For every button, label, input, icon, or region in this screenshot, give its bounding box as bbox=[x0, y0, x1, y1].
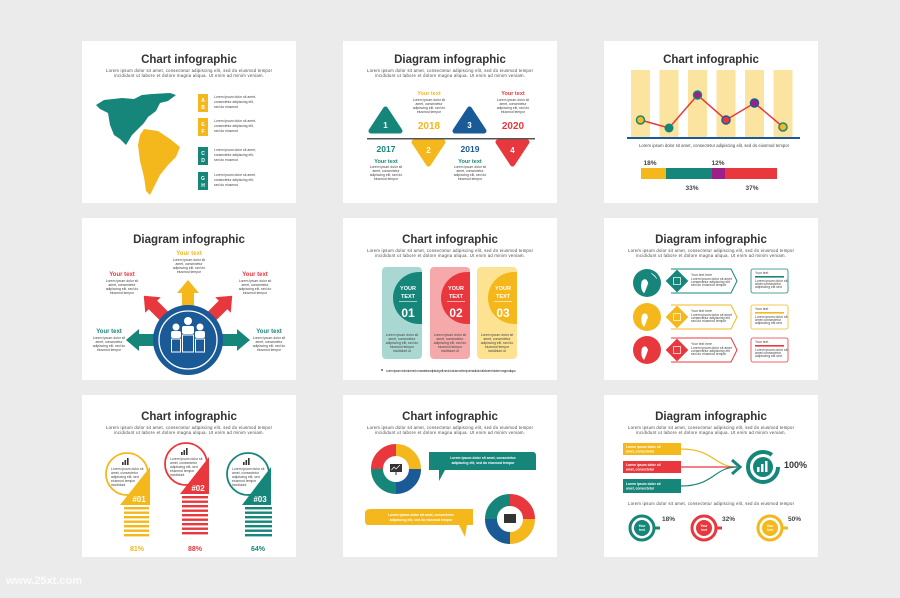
arrows bbox=[126, 280, 250, 351]
title: Diagram infographic bbox=[655, 411, 768, 423]
card 03: eiusmod tempor bbox=[485, 345, 510, 349]
text: right: amet, consectetur bbox=[256, 340, 283, 344]
bulb 01: amet, consectetur bbox=[111, 471, 139, 475]
percent circle 32 bbox=[692, 516, 735, 540]
text: upper left: adipiscing elit, sed do bbox=[106, 287, 138, 291]
step 2: 2018 bbox=[418, 121, 441, 132]
bulb 01: Lorem ipsum dolor sit bbox=[111, 467, 143, 471]
row 1 teal: Lorem ipsum dolor sit bbox=[755, 279, 787, 283]
slide: arrows diagram bbox=[82, 218, 296, 380]
subtitle text bbox=[628, 248, 795, 258]
bulb 02: #02 bbox=[191, 484, 205, 493]
bulb 02: incididunt bbox=[170, 473, 184, 477]
row 1 teal: consectetur adipiscing elit bbox=[691, 280, 730, 284]
subtitle text: incididunt ut labore et dolore magna aliqua. Ut enim ad minim veniam. bbox=[375, 430, 525, 435]
slide: line chart bbox=[604, 41, 818, 203]
card 02: amet, consectetur bbox=[437, 337, 464, 341]
line chart bbox=[636, 91, 787, 132]
callout teal: adipiscing elit, sed do eiusmod tempor bbox=[452, 461, 515, 465]
row 3 red: Your text bbox=[755, 340, 768, 344]
step 4: amet, consectetur bbox=[500, 102, 527, 106]
bulb 01: eiusmod tempor bbox=[111, 479, 136, 483]
row 1 teal: sed do eiusmod tempor bbox=[691, 283, 727, 287]
row 2 yellow: Lorem ipsum dolor sit bbox=[755, 315, 787, 319]
row 2 yellow: sed do eiusmod tempor bbox=[691, 319, 727, 323]
text: left: Your text bbox=[96, 329, 122, 335]
card 02: eiusmod tempor bbox=[438, 345, 463, 349]
callout yellow bbox=[365, 509, 473, 537]
input boxes: amet, consectetur bbox=[626, 450, 655, 454]
legend list: Lorem ipsum dolor sit amet, bbox=[214, 173, 256, 177]
legend list: G bbox=[201, 176, 205, 182]
title: Chart infographic bbox=[402, 411, 499, 423]
subtitle text: Lorem ipsum dolor sit amet, consectetur adipiscing elit, sed do eiusmod tempor bbox=[367, 248, 534, 253]
legend list: H bbox=[201, 183, 205, 189]
text: top: Your text bbox=[176, 251, 202, 257]
text: upper left: eiusmod tempor bbox=[110, 291, 135, 295]
percent circle 50 bbox=[758, 516, 801, 540]
step 1: Lorem ipsum dolor sit bbox=[370, 165, 402, 169]
legend list: Lorem ipsum dolor sit amet, bbox=[214, 95, 256, 99]
percent circle 32: text bbox=[701, 528, 708, 532]
row 3 red: amet consectetur bbox=[755, 351, 782, 355]
text: right: Your text bbox=[256, 329, 282, 335]
bulb 01: adipiscing elit, sed bbox=[111, 475, 139, 479]
card 02: adipiscing elit, sed do bbox=[434, 341, 466, 345]
card 01: adipiscing elit, sed do bbox=[386, 341, 418, 345]
card 01: 01 bbox=[401, 306, 415, 320]
step 2: eiusmod tempor bbox=[417, 110, 442, 114]
step 4: 4 bbox=[510, 146, 515, 155]
text: upper left: amet, consectetur bbox=[109, 283, 136, 287]
stacked bar bbox=[641, 160, 777, 192]
card 03: amet, consectetur bbox=[484, 337, 511, 341]
card 02: incididunt ut bbox=[441, 349, 459, 353]
stacked bar: 18% bbox=[643, 160, 657, 167]
subtitle text: Lorem ipsum dolor sit amet, consectetur adipiscing elit, sed do eiusmod tempor bbox=[367, 68, 534, 73]
card 03: 03 bbox=[496, 306, 510, 320]
bulb 03: adipiscing elit, sed bbox=[232, 475, 260, 479]
donut 2 bbox=[491, 500, 529, 538]
caption: Lorem ipsum dolor sit amet, consectetur adipiscing elit, sed do eiusmod tempor bbox=[639, 143, 790, 148]
subtitle text: Lorem ipsum dolor sit amet, consectetur adipiscing elit, sed do eiusmod tempor bbox=[628, 248, 795, 253]
card 01 bbox=[382, 267, 422, 359]
stacked bar: 33% bbox=[685, 185, 699, 192]
bulb 03: eiusmod tempor bbox=[232, 479, 257, 483]
text: left: adipiscing elit, sed do bbox=[93, 344, 125, 348]
title: Chart infographic bbox=[663, 54, 760, 66]
row 2 yellow: Lorem ipsum dolor sit amet bbox=[691, 313, 732, 317]
card 02: TEXT bbox=[449, 294, 464, 300]
row 2 yellow: Your text bbox=[755, 307, 768, 311]
legend list: sed do eiusmod bbox=[214, 129, 238, 133]
input boxes: amet, consectetur bbox=[626, 486, 655, 490]
legend list: Lorem ipsum dolor sit amet, bbox=[214, 148, 256, 152]
card 01: YOUR bbox=[400, 286, 416, 292]
subtitle text bbox=[628, 425, 795, 435]
step 1 bbox=[370, 109, 402, 181]
row 1 teal bbox=[633, 269, 788, 297]
percent circle 18: 18% bbox=[662, 516, 675, 523]
card 03: Lorem ipsum dolor sit bbox=[481, 333, 513, 337]
central circle with people bbox=[153, 305, 223, 375]
text: upper right: Lorem ipsum dolor sit bbox=[239, 279, 271, 283]
watermark: www.25xt.com bbox=[5, 575, 82, 587]
step 3: Your text bbox=[458, 159, 482, 165]
legend list: F bbox=[201, 129, 205, 135]
text: top bbox=[173, 251, 205, 274]
bulb 01: 81% bbox=[130, 546, 145, 553]
bulb 03 bbox=[227, 453, 272, 553]
bulb 01: #01 bbox=[132, 495, 146, 504]
text: top: amet, consectetur bbox=[176, 262, 203, 266]
input boxes: Lorem ipsum dolor sit bbox=[626, 482, 662, 486]
row 1 teal: Your text bbox=[755, 271, 768, 275]
legend list: Lorem ipsum dolor sit amet, bbox=[214, 119, 256, 123]
callout teal bbox=[429, 452, 536, 481]
row 1 teal: Lorem ipsum dolor sit amet bbox=[691, 277, 732, 281]
text: upper right: Your text bbox=[242, 272, 268, 278]
step 2: Your text bbox=[417, 91, 441, 97]
step 1: amet, consectetur bbox=[373, 169, 400, 173]
card 01: eiusmod tempor bbox=[390, 345, 415, 349]
percent circle 18: text bbox=[639, 528, 646, 532]
row 3 red bbox=[633, 336, 788, 364]
step 2: adipiscing elit, sed do bbox=[413, 106, 445, 110]
step 4 bbox=[497, 91, 529, 164]
card 03: TEXT bbox=[496, 294, 511, 300]
card 01: incididunt ut bbox=[393, 349, 411, 353]
step 1: Your text bbox=[374, 159, 398, 165]
legend list: consectetur adipiscing elit, bbox=[214, 124, 254, 128]
row 2 yellow: Your text here bbox=[691, 309, 712, 313]
row 3 red: sed do eiusmod tempor bbox=[691, 352, 727, 356]
subtitle text: Lorem ipsum dolor sit amet, consectetur adipiscing elit, sed do eiusmod tempor bbox=[106, 425, 273, 430]
input boxes bbox=[623, 443, 681, 493]
slide: map chart bbox=[82, 41, 296, 203]
stacked bar: 37% bbox=[745, 185, 759, 192]
row 3 red: Lorem ipsum dolor sit amet bbox=[691, 346, 732, 350]
bulb 01 bbox=[106, 453, 150, 553]
step 4: 2020 bbox=[502, 121, 525, 132]
bulb 02 bbox=[165, 443, 209, 553]
text: upper left bbox=[106, 272, 138, 295]
title: Chart infographic bbox=[141, 54, 238, 66]
subtitle text: Lorem ipsum dolor sit amet, consectetur adipiscing elit, sed do eiusmod tempor bbox=[628, 425, 795, 430]
text: upper right bbox=[239, 272, 271, 295]
subtitle text bbox=[367, 68, 534, 78]
percent circle 18 bbox=[630, 516, 675, 540]
subtitle text: incididunt ut labore et dolore magna aliqua. Ut enim ad minim veniam. bbox=[636, 253, 786, 258]
text: right: Lorem ipsum dolor sit bbox=[253, 336, 285, 340]
card 02 bbox=[430, 267, 470, 359]
title: Diagram infographic bbox=[133, 234, 246, 246]
slide: globes diagram bbox=[604, 218, 818, 380]
bulb 01: incididunt bbox=[111, 483, 125, 487]
input boxes: Lorem ipsum dolor sit bbox=[626, 463, 662, 467]
step 3: 3 bbox=[467, 121, 472, 130]
title: Diagram infographic bbox=[394, 54, 507, 66]
stacked bar: 12% bbox=[711, 160, 725, 167]
card 02: YOUR bbox=[448, 286, 464, 292]
subtitle text bbox=[106, 68, 273, 78]
step 2 bbox=[413, 91, 445, 164]
card 03: incididunt ut bbox=[488, 349, 506, 353]
step 3: amet, consectetur bbox=[457, 169, 484, 173]
text: right: eiusmod tempor bbox=[257, 348, 282, 352]
text: left: amet, consectetur bbox=[96, 340, 123, 344]
step 3 bbox=[454, 109, 486, 181]
card 03 bbox=[477, 267, 517, 359]
subtitle text: incididunt ut labore et dolore magna aliqua. Ut enim ad minim veniam. bbox=[375, 73, 525, 78]
row 3 red: adipiscing elit sed bbox=[755, 354, 782, 358]
subtitle text bbox=[367, 248, 534, 258]
caption: Lorem ipsum dolor sit amet, consectetur adipiscing elit, sed do eiusmod tempor bbox=[628, 501, 795, 506]
card 03: adipiscing elit, sed do bbox=[481, 341, 513, 345]
step 4: Your text bbox=[501, 91, 525, 97]
100% circle: 100% bbox=[784, 460, 807, 470]
card 03: YOUR bbox=[495, 286, 511, 292]
legend list: E bbox=[201, 122, 205, 128]
bulb 03: amet, consectetur bbox=[232, 471, 260, 475]
legend list bbox=[198, 94, 256, 190]
subtitle text: Lorem ipsum dolor sit amet, consectetur adipiscing elit, sed do eiusmod tempor bbox=[367, 425, 534, 430]
row 1 teal: adipiscing elit sed bbox=[755, 285, 782, 289]
subtitle text: incididunt ut labore et dolore magna aliqua. Ut enim ad minim veniam. bbox=[636, 430, 786, 435]
percent circle 50: Your bbox=[766, 524, 774, 528]
step 1: adipiscing elit, sed do bbox=[370, 173, 402, 177]
step 2: Lorem ipsum dolor sit bbox=[413, 98, 445, 102]
slide: bulbs chart bbox=[82, 395, 296, 557]
step 3: 2019 bbox=[461, 144, 480, 154]
text: left: Lorem ipsum dolor sit bbox=[93, 336, 125, 340]
subtitle text: incididunt ut labore et dolore magna aliqua. Ut enim ad minim veniam. bbox=[114, 73, 264, 78]
step 2: amet, consectetur bbox=[416, 102, 443, 106]
bulb 02: adipiscing elit, sed bbox=[170, 465, 198, 469]
card 01: TEXT bbox=[401, 294, 416, 300]
callout yellow: Lorem ipsum dolor sit amet, consectetur bbox=[388, 513, 454, 517]
legend list: sed do eiusmod bbox=[214, 158, 238, 162]
text: top: eiusmod tempor bbox=[177, 270, 202, 274]
legend list: consectetur adipiscing elit, bbox=[214, 153, 254, 157]
slide: timeline diagram bbox=[343, 41, 557, 203]
bulb 03: Lorem ipsum dolor sit bbox=[232, 467, 264, 471]
title: Chart infographic bbox=[141, 411, 238, 423]
bar columns bbox=[631, 70, 792, 138]
percent circle 18: Your bbox=[638, 524, 646, 528]
text: upper left: Your text bbox=[109, 272, 135, 278]
card 01: amet, consectetur bbox=[389, 337, 416, 341]
step 4: eiusmod tempor bbox=[501, 110, 526, 114]
card 02: 02 bbox=[449, 306, 463, 320]
step 1: 2017 bbox=[377, 144, 396, 154]
donut 1 bbox=[377, 450, 415, 488]
step 2: 2 bbox=[426, 146, 431, 155]
100% circle bbox=[748, 452, 807, 482]
row 3 red: Lorem ipsum dolor sit bbox=[755, 348, 787, 352]
title: Diagram infographic bbox=[655, 234, 768, 246]
text: left: eiusmod tempor bbox=[97, 348, 122, 352]
map: north america bbox=[96, 93, 176, 145]
bulb 03: incididunt bbox=[232, 483, 246, 487]
text: right bbox=[253, 329, 285, 352]
bulb 03: #03 bbox=[253, 495, 267, 504]
input boxes: Lorem ipsum dolor sit bbox=[626, 445, 662, 449]
subtitle text: Lorem ipsum dolor sit amet, consectetur adipiscing elit, sed do eiusmod tempor bbox=[106, 68, 273, 73]
card 01: Lorem ipsum dolor sit bbox=[386, 333, 418, 337]
slide: flow and percentages bbox=[604, 395, 818, 557]
percent circle 50: text bbox=[767, 528, 774, 532]
text: upper left: Lorem ipsum dolor sit bbox=[106, 279, 138, 283]
slide: three cards bbox=[343, 218, 557, 380]
row 1 teal: amet consectetur bbox=[755, 282, 782, 286]
row 3 red: Your text here bbox=[691, 342, 712, 346]
bulb 03: 64% bbox=[251, 546, 266, 553]
step 3: adipiscing elit, sed do bbox=[454, 173, 486, 177]
row 2 yellow bbox=[633, 303, 788, 331]
subtitle text bbox=[106, 425, 273, 435]
legend list: consectetur adipiscing elit, bbox=[214, 100, 254, 104]
bulb 02: eiusmod tempor bbox=[170, 469, 195, 473]
callout teal: Lorem ipsum dolor sit amet, consectetur bbox=[450, 456, 516, 460]
percent circle 32: 32% bbox=[722, 516, 735, 523]
callout yellow: adipiscing elit, sed do eiusmod tempor bbox=[390, 518, 453, 522]
step 3: eiusmod tempor bbox=[458, 177, 483, 181]
text: right: adipiscing elit, sed do bbox=[253, 344, 285, 348]
step 4: Lorem ipsum dolor sit bbox=[497, 98, 529, 102]
card 02: Lorem ipsum dolor sit bbox=[434, 333, 466, 337]
step 1: eiusmod tempor bbox=[374, 177, 399, 181]
subtitle text bbox=[367, 425, 534, 435]
legend list: C bbox=[201, 151, 205, 157]
legend list: A bbox=[201, 98, 205, 104]
bulb 02: 88% bbox=[188, 546, 203, 553]
step 4: adipiscing elit, sed do bbox=[497, 106, 529, 110]
bulb 02: Lorem ipsum dolor sit bbox=[170, 457, 202, 461]
legend list: consectetur adipiscing elit, bbox=[214, 178, 254, 182]
text: upper right: eiusmod tempor bbox=[243, 291, 268, 295]
input boxes: amet, consectetur bbox=[626, 468, 655, 472]
text: top: adipiscing elit, sed do bbox=[173, 266, 205, 270]
map: south america bbox=[138, 129, 180, 195]
legend list: D bbox=[201, 158, 205, 164]
row 2 yellow: consectetur adipiscing elit bbox=[691, 316, 730, 320]
legend list: sed do eiusmod bbox=[214, 105, 238, 109]
row 2 yellow: amet consectetur bbox=[755, 318, 782, 322]
percent circle 50: 50% bbox=[788, 516, 801, 523]
text: left bbox=[93, 329, 125, 352]
step 3: Lorem ipsum dolor sit bbox=[454, 165, 486, 169]
row 3 red: consectetur adipiscing elit bbox=[691, 349, 730, 353]
legend list: sed do eiusmod bbox=[214, 183, 238, 187]
footnote: Lorem ipsum dolor sit amet, consectetur adipiscing elit, sed do eiusmod tempor incididunt ut labore et dolore magna aliqua. bbox=[386, 369, 516, 373]
subtitle text: incididunt ut labore et dolore magna aliqua. Ut enim ad minim veniam. bbox=[375, 253, 525, 258]
step 1: 1 bbox=[383, 121, 388, 130]
bulb 02: amet, consectetur bbox=[170, 461, 198, 465]
row 2 yellow: adipiscing elit sed bbox=[755, 321, 782, 325]
title: Chart infographic bbox=[402, 234, 499, 246]
text: upper right: amet, consectetur bbox=[242, 283, 269, 287]
flow lines bbox=[681, 449, 740, 486]
text: upper right: adipiscing elit, sed do bbox=[239, 287, 271, 291]
slide: puzzle donuts bbox=[343, 395, 557, 557]
text: top: Lorem ipsum dolor sit bbox=[173, 258, 205, 262]
percent circle 32: Your bbox=[700, 524, 708, 528]
row 1 teal: Your text here bbox=[691, 273, 712, 277]
legend list: B bbox=[201, 105, 205, 111]
subtitle text: incididunt ut labore et dolore magna aliqua. Ut enim ad minim veniam. bbox=[114, 430, 264, 435]
